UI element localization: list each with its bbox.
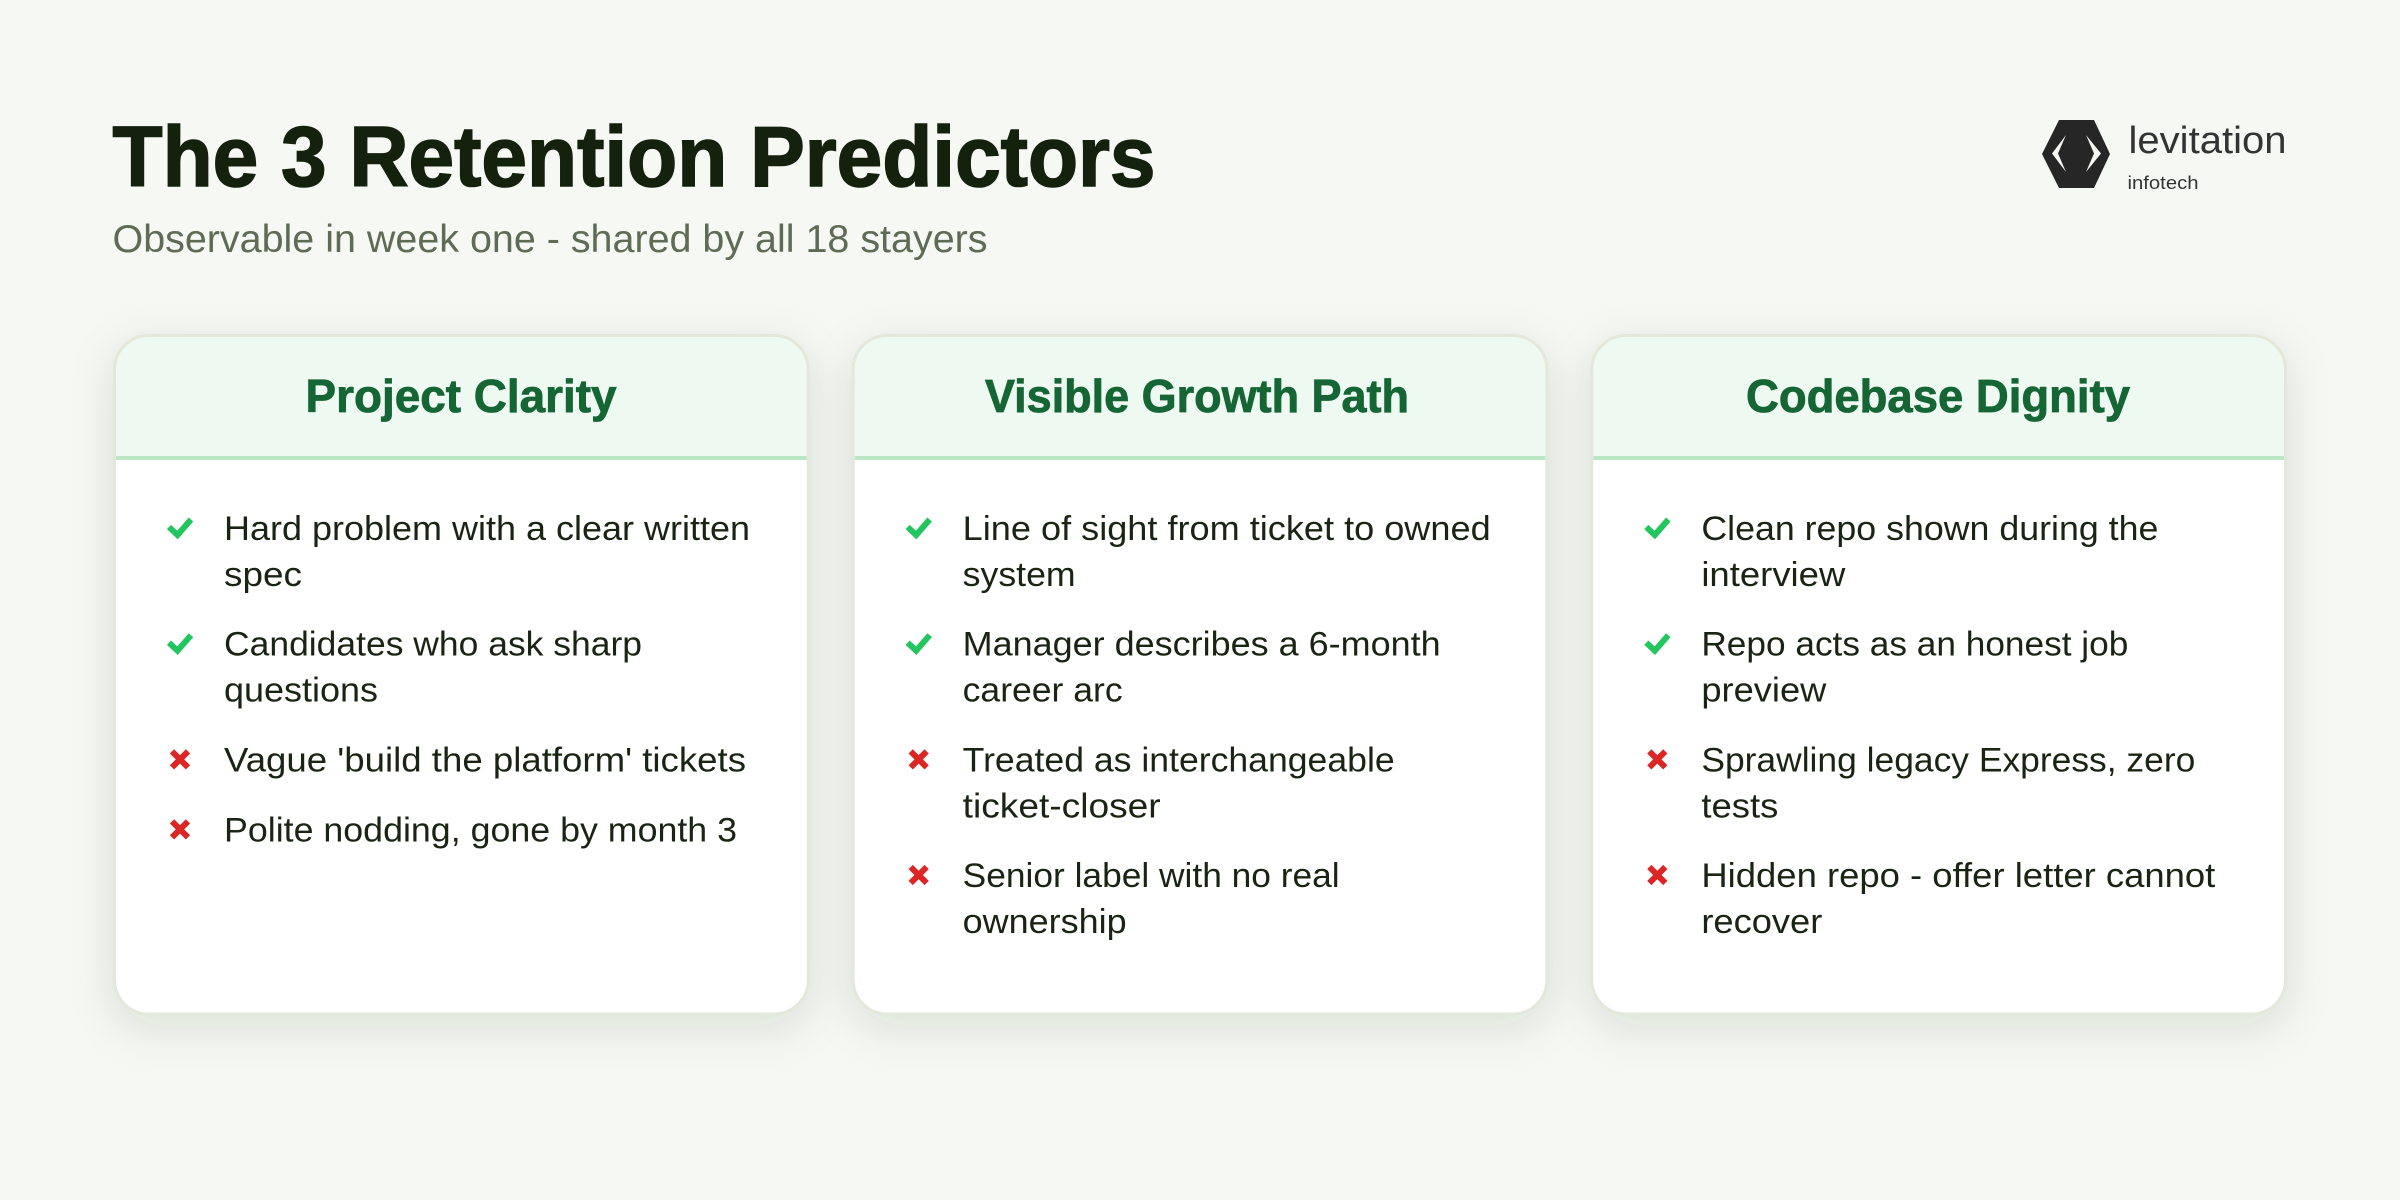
text: item 2: Manager describes a 6-month	[963, 626, 1441, 664]
text: item 3: ticket-closer	[963, 787, 1161, 825]
text: item 4: Polite nodding, gone by month 3	[224, 811, 737, 849]
text: item 4	[963, 857, 1340, 941]
text: item 4: Hidden repo - offer letter cannot	[1701, 857, 2216, 895]
icon: check	[908, 520, 930, 535]
text: item 2	[963, 626, 1441, 710]
heading: Visible Growth Path: Visible Growth Path	[985, 370, 1409, 422]
icon: check	[169, 520, 191, 535]
text: item 2	[1701, 626, 2128, 710]
text: item 2: Candidates who ask sharp	[224, 626, 642, 664]
icon: check	[908, 635, 930, 651]
panel header background	[1593, 337, 2284, 456]
text: item 3	[1701, 741, 2195, 825]
text: item 3: Sprawling legacy Express, zero	[1701, 741, 2195, 779]
text: item 2	[224, 626, 642, 710]
icon: cross	[172, 821, 188, 837]
text: item 3: tests	[1701, 787, 1778, 825]
text: item 1: Clean repo shown during the	[1701, 510, 2158, 548]
text: item 4: recover	[1701, 903, 1822, 941]
text: item 4: Senior label with no real	[963, 857, 1340, 895]
icon: check	[169, 635, 191, 651]
icon: check	[1646, 635, 1668, 651]
icon: hexagon logo mark	[2042, 120, 2110, 188]
text: item 1: interview	[1701, 556, 1845, 594]
panel header background	[116, 337, 807, 456]
panel: Codebase Dignity	[1592, 336, 2286, 1014]
panel: Project Clarity	[114, 336, 808, 1014]
icon: cross	[1649, 751, 1665, 767]
text: item 2: career arc	[963, 672, 1123, 710]
text: item 3: Vague 'build the platform' tickets	[224, 741, 746, 779]
text: item 3	[963, 741, 1395, 825]
icon: check	[1646, 520, 1668, 535]
subtitle: Observable in week one - shared by all 18 stayers	[112, 218, 988, 261]
text: item 4: ownership	[963, 903, 1127, 941]
logo: levitation infotech	[2042, 120, 2286, 193]
panel: Visible Growth Path	[853, 336, 1547, 1014]
icon: cross	[911, 867, 927, 883]
icon: cross	[911, 751, 927, 767]
text: item 4	[1701, 857, 2216, 941]
text: item 1: system	[963, 556, 1076, 594]
text: item 2: questions	[224, 672, 378, 710]
text: item 2: Repo acts as an honest job	[1701, 626, 2128, 664]
text: item 1: Hard problem with a clear written	[224, 510, 750, 548]
icon: cross	[172, 751, 188, 767]
heading: Codebase Dignity: Codebase Dignity	[1746, 370, 2130, 422]
text: item 1: spec	[224, 556, 302, 594]
text: item 1	[224, 510, 750, 594]
panel header background	[855, 337, 1545, 456]
logo subtext: infotech	[2128, 173, 2198, 193]
heading: Project Clarity: Project Clarity	[306, 370, 617, 422]
logo wordmark: levitation	[2128, 120, 2286, 162]
text: item 1: Line of sight from ticket to owned	[963, 510, 1491, 548]
text: item 3: Treated as interchangeable	[963, 741, 1395, 779]
text: item 2: preview	[1701, 672, 1826, 710]
icon: cross	[1649, 867, 1665, 883]
text: item 1	[963, 510, 1491, 594]
text: item 1	[1701, 510, 2158, 594]
title: The 3 Retention Predictors	[112, 110, 1156, 205]
